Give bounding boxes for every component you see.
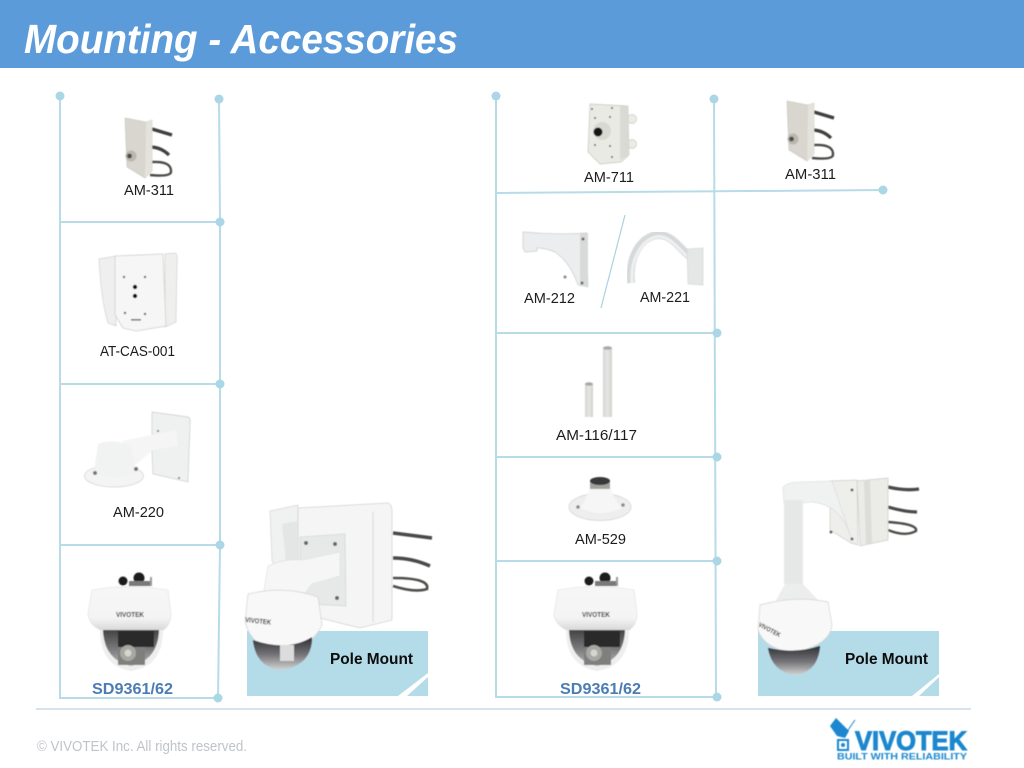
panel: pole mount left (247, 631, 428, 696)
camera: SD9361/62 left (88, 572, 171, 671)
label: AM-311 left: AM-311 (124, 183, 174, 199)
icon: AM-212 wall arm (523, 232, 588, 287)
label: SD9361/62 right: SD9361/62 (560, 681, 641, 698)
image: camera on pole mount box, left: VIVOTEK (245, 617, 271, 627)
copyright: © VIVOTEK Inc. All rights reserved. (37, 739, 247, 755)
logo: VIVOTEK: BUILT WITH RELIABILITY (837, 752, 968, 762)
image: camera on pole mount arm, right: VIVOTEK (757, 622, 782, 639)
label: AM-220: AM-220 (113, 505, 164, 521)
label: AM-212: AM-212 (524, 291, 575, 307)
left accessory grid (56, 92, 224, 702)
label: pole mount right: Pole Mount (845, 651, 928, 668)
image: camera on pole mount arm, right (757, 478, 919, 675)
icon: AT-CAS-001 enclosure (99, 253, 177, 331)
panel: pole mount right (758, 631, 939, 696)
divider: slash between AM-212 and AM-221 (601, 215, 625, 308)
image: camera on pole mount box, left (245, 503, 432, 670)
logo: VIVOTEK (830, 718, 968, 762)
camera: SD9361/62 right: VIVOTEK (582, 612, 610, 619)
title: Mounting - Accessories (24, 16, 458, 62)
label: AM-529: AM-529 (575, 532, 626, 548)
right accessory grid (492, 92, 888, 702)
icon: AM-711 junction box (588, 104, 636, 164)
camera: SD9361/62 right (554, 572, 637, 671)
footer rule (36, 708, 971, 710)
label: SD9361/62 left: SD9361/62 (92, 681, 173, 698)
header band (0, 0, 1024, 68)
label: AM-116/117: AM-116/117 (556, 428, 637, 444)
label: AM-311 right: AM-311 (785, 167, 836, 183)
logo: VIVOTEK: VIVOTEK (855, 726, 967, 756)
camera: SD9361/62 left: VIVOTEK (116, 612, 144, 619)
icon: AM-116/117 pole extensions (585, 346, 612, 417)
label: AT-CAS-001: AT-CAS-001 (100, 344, 175, 360)
icon: AM-311 bracket, right (787, 101, 834, 161)
label: AM-711: AM-711 (584, 170, 634, 186)
icon: AM-311 bracket, left (125, 118, 172, 178)
label: AM-221: AM-221 (640, 290, 690, 306)
icon: AM-529 ceiling mount (569, 477, 631, 520)
icon: AM-220 wall mount (84, 412, 190, 487)
icon: AM-221 gooseneck arm (631, 235, 703, 285)
label: pole mount left: Pole Mount (330, 651, 413, 668)
